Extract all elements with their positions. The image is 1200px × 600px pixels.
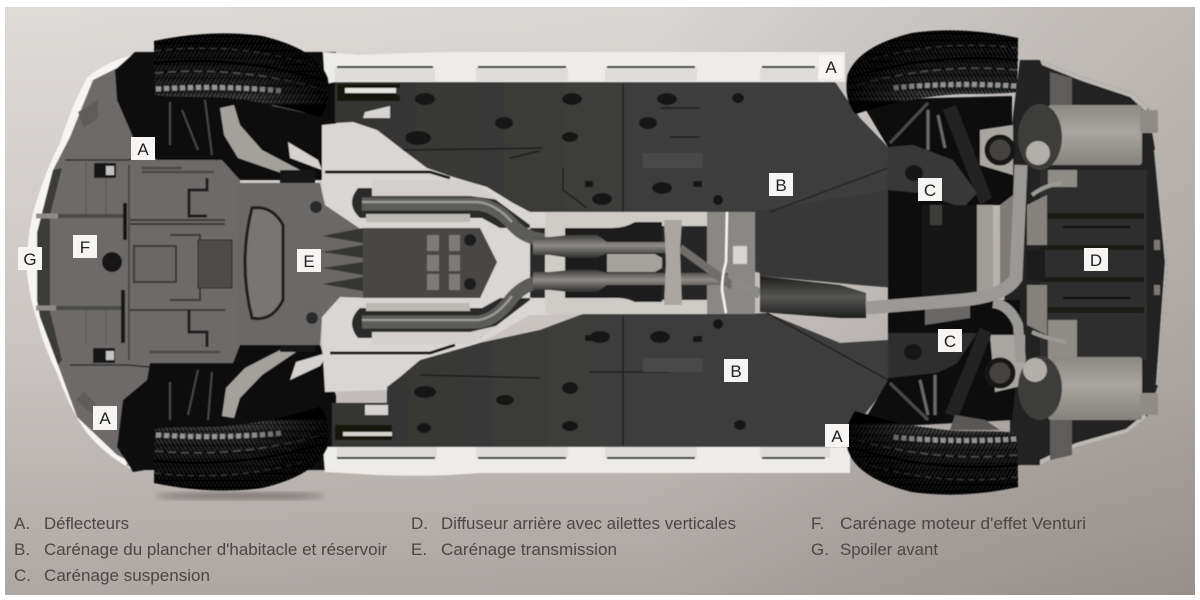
tyre: rear top [847,30,1018,114]
panel: front engine undertray F [36,54,240,468]
legend column 2: D. [411,514,428,533]
oil drain [102,252,122,272]
rear shell and diffuser [1000,60,1167,465]
legend column 1: Déflecteurs [44,514,129,533]
panel: rear diffuser D [1040,170,1147,360]
tyre: front top [154,33,329,117]
rectangular access hatch [134,246,176,282]
side sills [323,52,850,476]
label: B upper: B [775,176,787,195]
legend column 1: Carénage du plancher d'habitacle et réservoir [44,540,387,559]
fairing C upper [887,145,977,208]
legend column 2: Diffuseur arrière avec ailettes verticales [441,514,736,533]
front suspension arms [170,100,330,440]
label: D: D [1090,251,1102,270]
label: B lower [724,359,748,382]
ground shadow [155,492,325,500]
label: G [18,247,42,270]
cross brace [664,220,682,305]
panel: upper floor fairing B [335,82,922,290]
differential [922,205,977,300]
white cable [722,212,727,313]
label: B lower: B [730,362,742,381]
exhaust front pipes [362,202,548,322]
label: C upper [918,178,942,201]
catalyst upper [533,235,672,258]
legend column 3: Spoiler avant [840,540,938,559]
legend column 2 [411,514,736,559]
legend column 3: G. [811,540,829,559]
label: A front bottom: A [99,409,111,428]
legend column 3: Carénage moteur d'effet Venturi [840,514,1086,533]
fairing C lower [888,333,977,378]
legend column 2: E. [411,540,427,559]
label: D [1084,248,1108,271]
legend column 3: F. [811,514,824,533]
rear suspension [860,96,1025,430]
white structure beside exhaust [322,122,550,392]
legend column 1 [14,514,387,585]
legend column 1: C. [14,566,31,585]
car underbody [27,30,1167,500]
centre muffler [733,276,866,318]
label: F: F [80,238,90,257]
legend column 2: Carénage transmission [441,540,617,559]
label: F [73,235,97,258]
panel: lower floor fairing B [332,313,888,447]
tyre: front bottom [154,407,329,491]
label: A sill top: A [825,58,837,77]
label: A sill bottom [825,424,849,447]
label: A front bottom [93,406,117,430]
label: B upper [769,173,793,196]
label: A front top: A [137,140,149,159]
front bumper white outline [27,55,180,470]
label: A sill bottom: A [831,427,843,446]
panel: transmission fairing E [238,183,497,345]
label: A front top [131,137,155,160]
central tunnel with catalysts [533,212,755,314]
legend column 1: B. [14,540,30,559]
legend column 3 [811,514,1086,559]
label: C upper: C [924,181,936,200]
legend column 1: Carénage suspension [44,566,210,585]
rear mufflers [1018,104,1158,420]
label: C lower: C [944,332,956,351]
label: A sill top [819,55,843,79]
rear exhaust pipes [866,165,1066,362]
legend column 1: A. [14,514,30,533]
label: E: E [303,252,315,271]
centre silver catalyst [607,254,662,272]
catalyst lower [533,270,728,292]
label: E [297,249,321,272]
tyre: rear bottom [847,411,1018,495]
front wheel arches (black) [115,52,336,180]
label: C lower [938,329,962,352]
label: G: G [23,250,37,269]
